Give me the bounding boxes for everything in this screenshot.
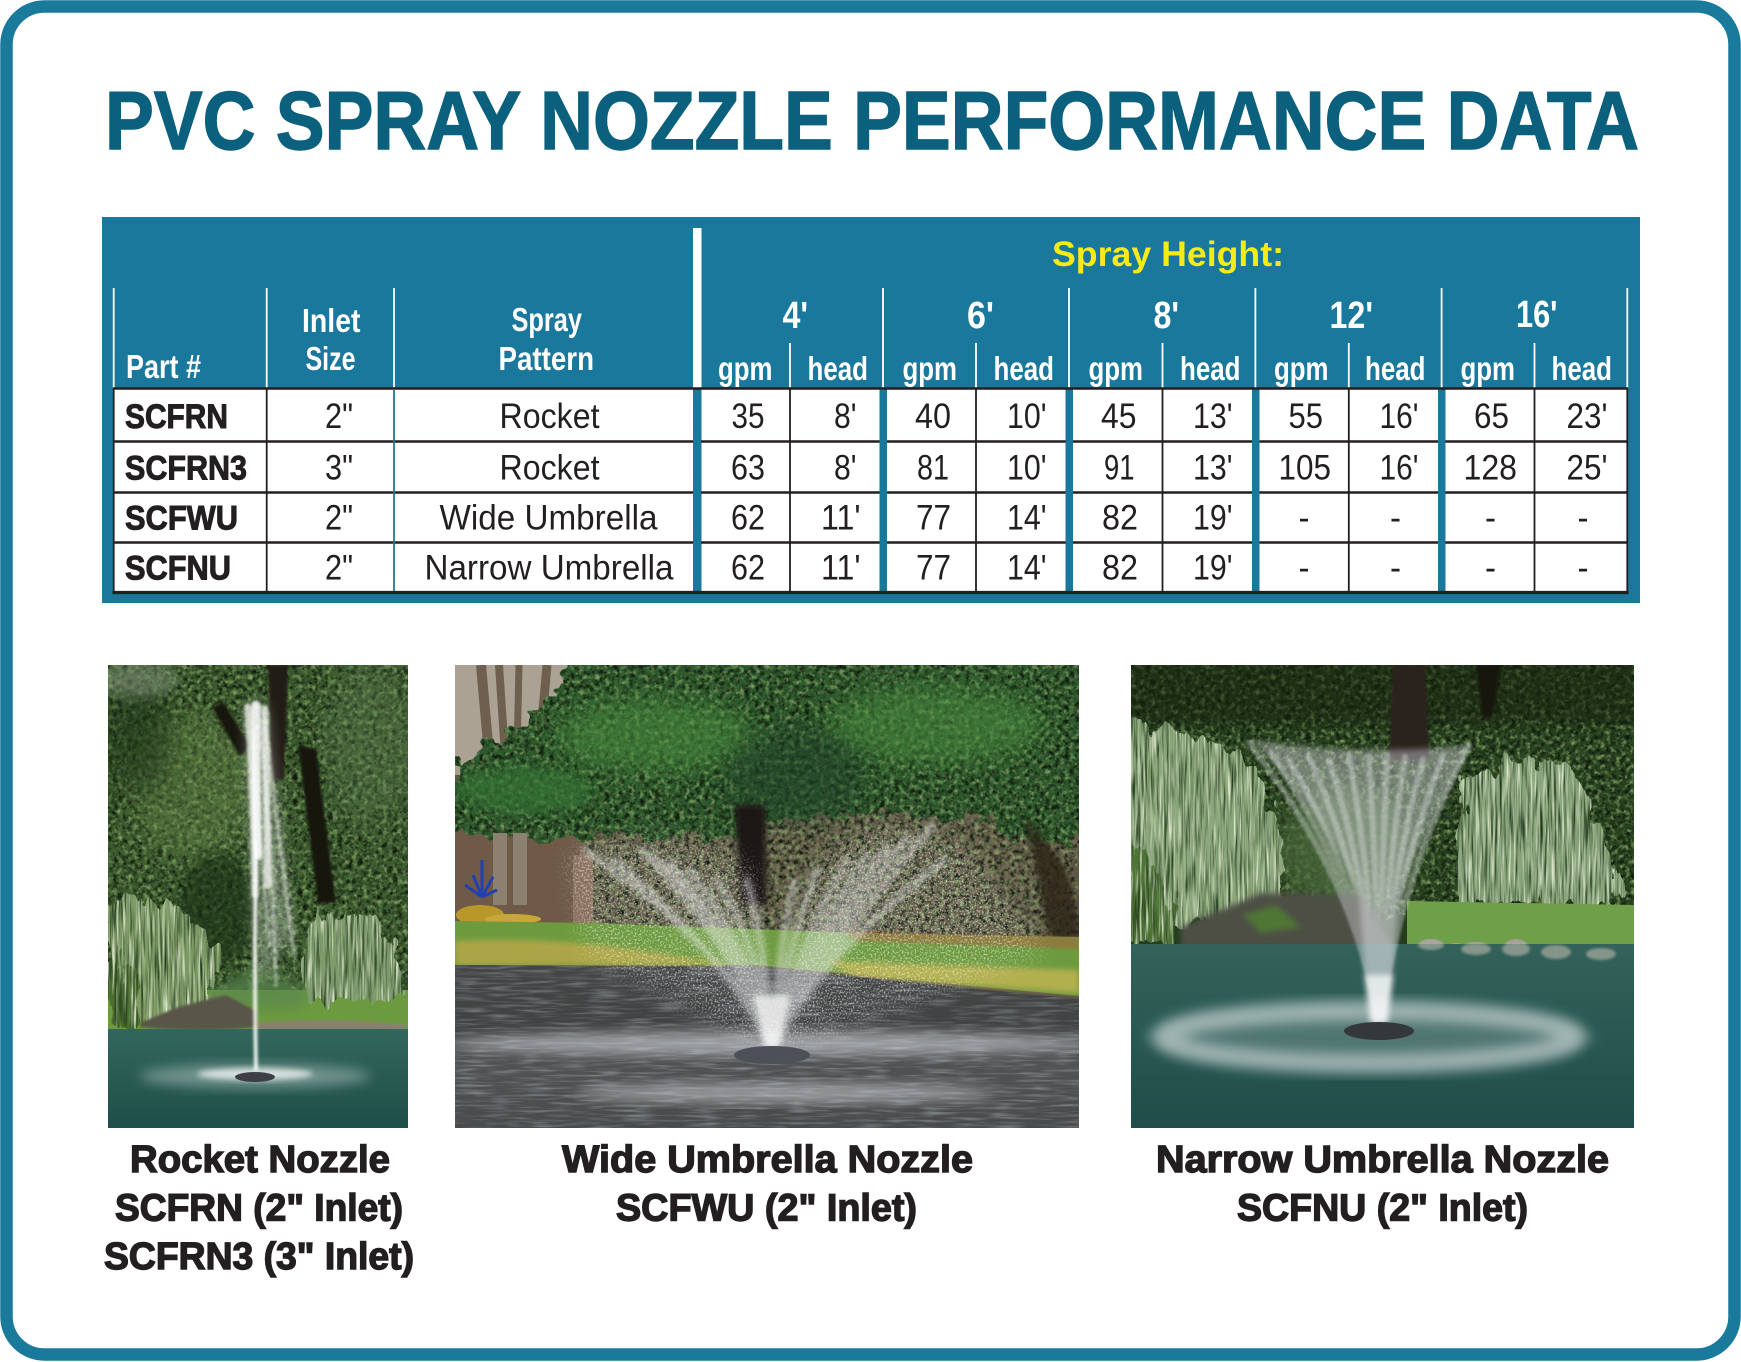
table background	[102, 217, 1640, 603]
row: SCFRN: 8'	[834, 397, 856, 436]
caption: wide umbrella nozzle: SCFWU (2" Inlet)	[616, 1188, 917, 1230]
row: SCFRN: SCFRN	[125, 398, 228, 436]
row: SCFWU: -	[1578, 498, 1588, 538]
caption: narrow umbrella nozzle: SCFNU (2" Inlet)	[1237, 1188, 1528, 1230]
column headers: Spray	[512, 301, 582, 338]
column headers: 4'	[782, 295, 808, 337]
spray height heading: Spray Height:	[1052, 235, 1284, 274]
photo: rocket nozzle fountain	[108, 665, 408, 1128]
photo: narrow umbrella nozzle fountain	[1131, 665, 1634, 1128]
row: SCFNU: 62	[731, 548, 765, 588]
row: SCFRN3	[125, 448, 1608, 488]
column headers: Pattern	[498, 340, 594, 377]
column headers: head	[808, 350, 868, 387]
caption: rocket nozzle: SCFRN3 (3" Inlet)	[104, 1236, 414, 1278]
row: SCFWU: 19'	[1193, 498, 1232, 538]
row: SCFRN3: 63	[731, 448, 765, 488]
row: SCFRN: 16'	[1380, 397, 1418, 436]
row: SCFNU: SCFNU	[125, 550, 231, 588]
row: SCFRN3: 25'	[1566, 448, 1608, 488]
caption: rocket nozzle	[104, 1139, 414, 1278]
column headers: gpm	[902, 350, 957, 387]
row: SCFWU: 62	[731, 498, 765, 538]
row: SCFWU: -	[1298, 498, 1310, 538]
column headers: head	[1365, 350, 1426, 387]
column headers: head	[1552, 350, 1612, 387]
caption: rocket nozzle: SCFRN (2" Inlet)	[115, 1188, 403, 1230]
row: SCFWU: -	[1390, 498, 1401, 538]
row: SCFRN3: 3"	[325, 448, 353, 488]
row: SCFWU: Wide Umbrella	[440, 498, 658, 538]
caption: rocket nozzle: Rocket Nozzle	[130, 1139, 390, 1181]
performance table	[102, 217, 1640, 603]
column headers: head	[994, 350, 1054, 387]
row: SCFRN: 40	[915, 397, 951, 436]
row: SCFWU: 2"	[325, 498, 353, 538]
row: SCFRN	[125, 397, 1608, 436]
row: SCFNU	[125, 548, 1588, 588]
row: SCFNU: 11'	[821, 548, 860, 588]
caption: wide umbrella nozzle	[562, 1139, 973, 1230]
row: SCFNU: 82	[1102, 548, 1138, 588]
table body rows background	[114, 388, 1627, 592]
row: SCFRN: 45	[1101, 397, 1136, 436]
row: SCFRN3: SCFRN3	[125, 450, 247, 488]
row: SCFNU: -	[1298, 548, 1310, 588]
row: SCFRN3: 105	[1278, 448, 1331, 488]
row: SCFNU: -	[1390, 548, 1401, 588]
column headers: Part #	[126, 348, 201, 385]
row: SCFWU: 77	[916, 498, 951, 538]
row: SCFRN: 35	[732, 397, 764, 436]
column headers: gpm	[1460, 350, 1515, 387]
row: SCFNU: -	[1578, 548, 1588, 588]
row: SCFRN3: Rocket	[500, 448, 600, 488]
row: SCFNU: 14'	[1007, 548, 1046, 588]
column headers: gpm	[1088, 350, 1143, 387]
column headers: gpm	[1274, 350, 1328, 387]
column headers: Inlet	[302, 302, 361, 339]
row: SCFRN3: 91	[1104, 448, 1134, 488]
row: SCFWU: -	[1485, 498, 1496, 538]
row: SCFRN: 10'	[1007, 397, 1046, 436]
column headers	[126, 294, 1612, 387]
column headers: 6'	[967, 295, 994, 337]
row: SCFWU: 11'	[821, 498, 860, 538]
row: SCFRN3: 10'	[1007, 448, 1046, 488]
photo: wide umbrella nozzle fountain	[455, 665, 1079, 1128]
row: SCFNU: -	[1485, 548, 1496, 588]
row: SCFRN3: 16'	[1380, 448, 1418, 488]
row: SCFWU: SCFWU	[125, 500, 238, 538]
column headers: 8'	[1154, 295, 1179, 337]
column headers: Size	[306, 340, 356, 377]
row: SCFRN: 13'	[1193, 397, 1232, 436]
row: SCFRN: 55	[1288, 397, 1323, 436]
caption: narrow umbrella nozzle	[1156, 1139, 1609, 1230]
row: SCFRN3: 128	[1464, 448, 1517, 488]
row: SCFNU: 19'	[1193, 548, 1232, 588]
row: SCFWU	[125, 498, 1588, 538]
caption: narrow umbrella nozzle: Narrow Umbrella Nozzle	[1156, 1139, 1609, 1181]
caption: wide umbrella nozzle: Wide Umbrella Nozzle	[562, 1139, 973, 1181]
row: SCFNU: Narrow Umbrella	[424, 548, 674, 588]
column headers: 16'	[1516, 294, 1558, 336]
row: SCFRN: 65	[1474, 397, 1509, 436]
row: SCFRN3: 8'	[834, 448, 856, 488]
row: SCFRN: 23'	[1566, 397, 1608, 436]
row: SCFRN3: 13'	[1193, 448, 1232, 488]
row: SCFNU: 2"	[325, 548, 353, 588]
column headers: 12'	[1330, 295, 1373, 337]
row: SCFRN: 2"	[325, 397, 353, 436]
row: SCFNU: 77	[916, 548, 951, 588]
row: SCFWU: 14'	[1007, 498, 1046, 538]
row: SCFWU: 82	[1102, 498, 1138, 538]
row: SCFRN3: 81	[917, 448, 949, 488]
column headers: head	[1180, 350, 1240, 387]
column headers: gpm	[718, 350, 772, 387]
row: SCFRN: Rocket	[500, 397, 600, 436]
